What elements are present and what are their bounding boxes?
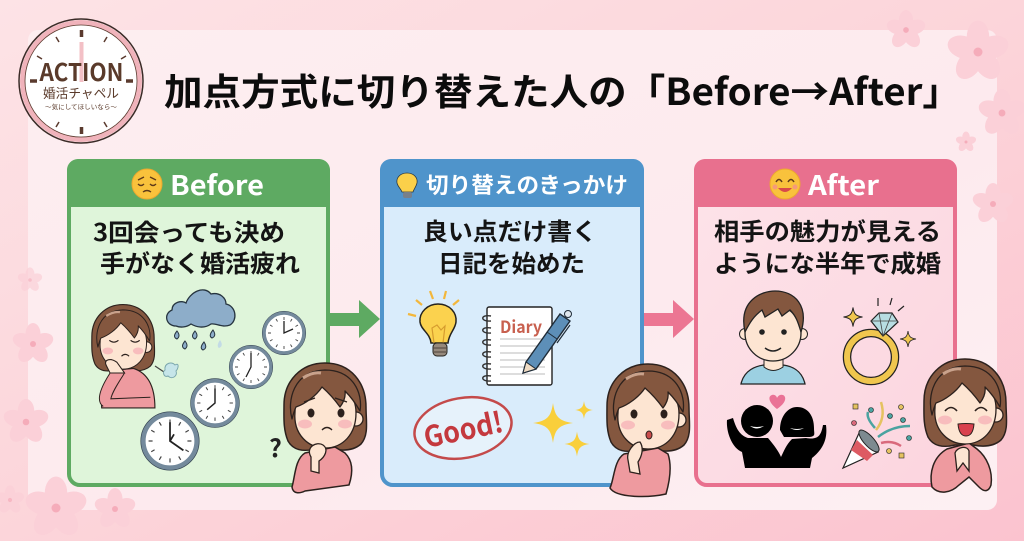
text: before description: 手がなく婚活疲れ xyxy=(100,244,300,279)
panel: before xyxy=(67,159,330,485)
text: trigger description: 日記を始めた xyxy=(438,244,585,279)
panel: trigger xyxy=(380,159,644,485)
text: trigger description: 良い点だけ書く xyxy=(423,212,597,247)
icon: diary notebook xyxy=(483,307,552,385)
woman: worried xyxy=(284,363,367,493)
icon: heart xyxy=(769,395,785,409)
icon: smile emoji xyxy=(770,169,800,199)
text: after description: 相手の魅力が見える xyxy=(714,212,941,247)
arrow: trigger to after xyxy=(644,300,694,338)
icon: sad emoji xyxy=(132,169,162,199)
woman: curious xyxy=(607,364,690,496)
icon: diamond ring xyxy=(844,298,916,381)
icon: party popper xyxy=(843,402,912,468)
icon: good stamp xyxy=(410,390,516,466)
icon: couple silhouette xyxy=(727,405,826,468)
icon: small bulb xyxy=(397,173,417,198)
icon: sparkles xyxy=(533,401,593,456)
text: before description: 3回会っても決め xyxy=(93,213,285,248)
heading: trigger: 切り替えのきっかけ xyxy=(426,168,628,200)
heading: after: After xyxy=(807,164,879,203)
icon: clock 3 xyxy=(191,379,239,427)
heading: before: Before xyxy=(170,164,264,203)
woman: happy xyxy=(924,359,1007,492)
icon: rain cloud xyxy=(167,290,235,350)
icon: clock 2 xyxy=(229,345,273,389)
icon: question mark: ? xyxy=(269,429,282,465)
logo: ACTION clock: ACTION xyxy=(39,53,123,88)
logo: ACTION clock xyxy=(19,19,143,143)
arrow: before to trigger xyxy=(330,300,380,338)
text: after description: ようにな半年で成婚 xyxy=(714,244,941,279)
icon: good stamp: Good! xyxy=(420,399,506,457)
icon: clock 1 xyxy=(262,311,306,355)
logo: ACTION clock: 〜気にしてほしいなら〜 xyxy=(45,101,117,111)
logo: ACTION clock: 婚活チャペル xyxy=(43,83,119,102)
title: 加点方式に切り替えた人の「Before→After」 xyxy=(164,62,961,116)
icon: light bulb xyxy=(408,291,459,356)
icon: pen xyxy=(523,310,572,373)
icon: tired woman xyxy=(92,305,155,408)
icon: diary notebook: Diary xyxy=(500,313,542,338)
icon: clock 4 xyxy=(141,412,199,470)
icon: sigh puff xyxy=(155,363,178,378)
icon: man xyxy=(740,291,808,384)
panel: after xyxy=(694,159,957,485)
